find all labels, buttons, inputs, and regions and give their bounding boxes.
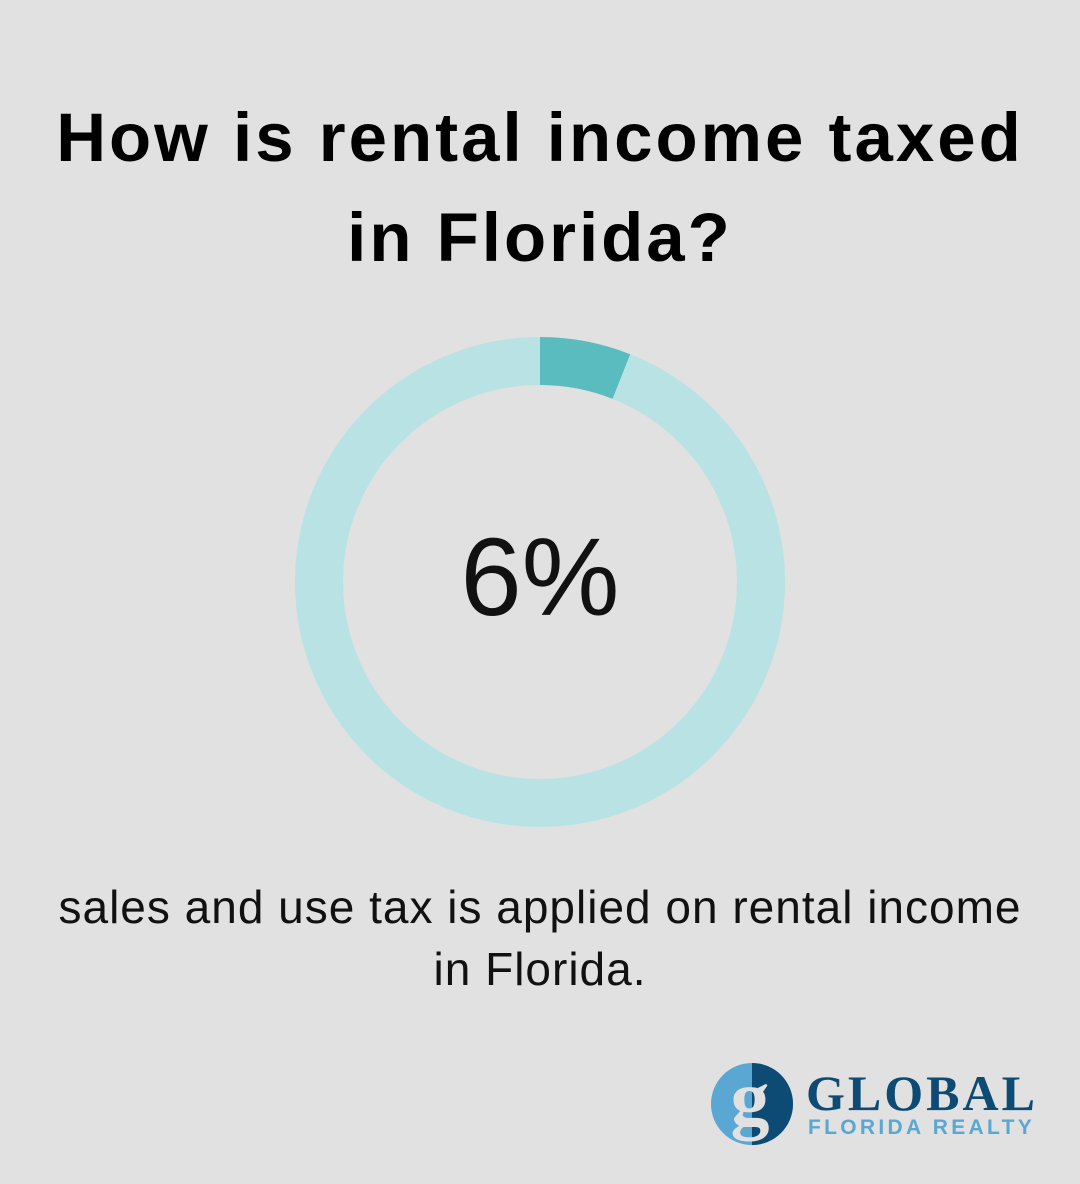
- title: [56, 99, 1024, 276]
- description: sales and use tax is applied on rental income: [58, 881, 1022, 933]
- icon: g circle: [711, 1062, 793, 1145]
- logo: [711, 1062, 1038, 1145]
- title: How is rental income taxed: [56, 99, 1024, 176]
- logo: FLORIDA REALTY: [808, 1116, 1035, 1139]
- logo text: GLOBAL: [806, 1065, 1038, 1121]
- donut chart: 6%: [461, 516, 619, 639]
- description: [58, 881, 1022, 995]
- description: in Florida.: [434, 943, 646, 995]
- title: in Florida?: [347, 199, 733, 276]
